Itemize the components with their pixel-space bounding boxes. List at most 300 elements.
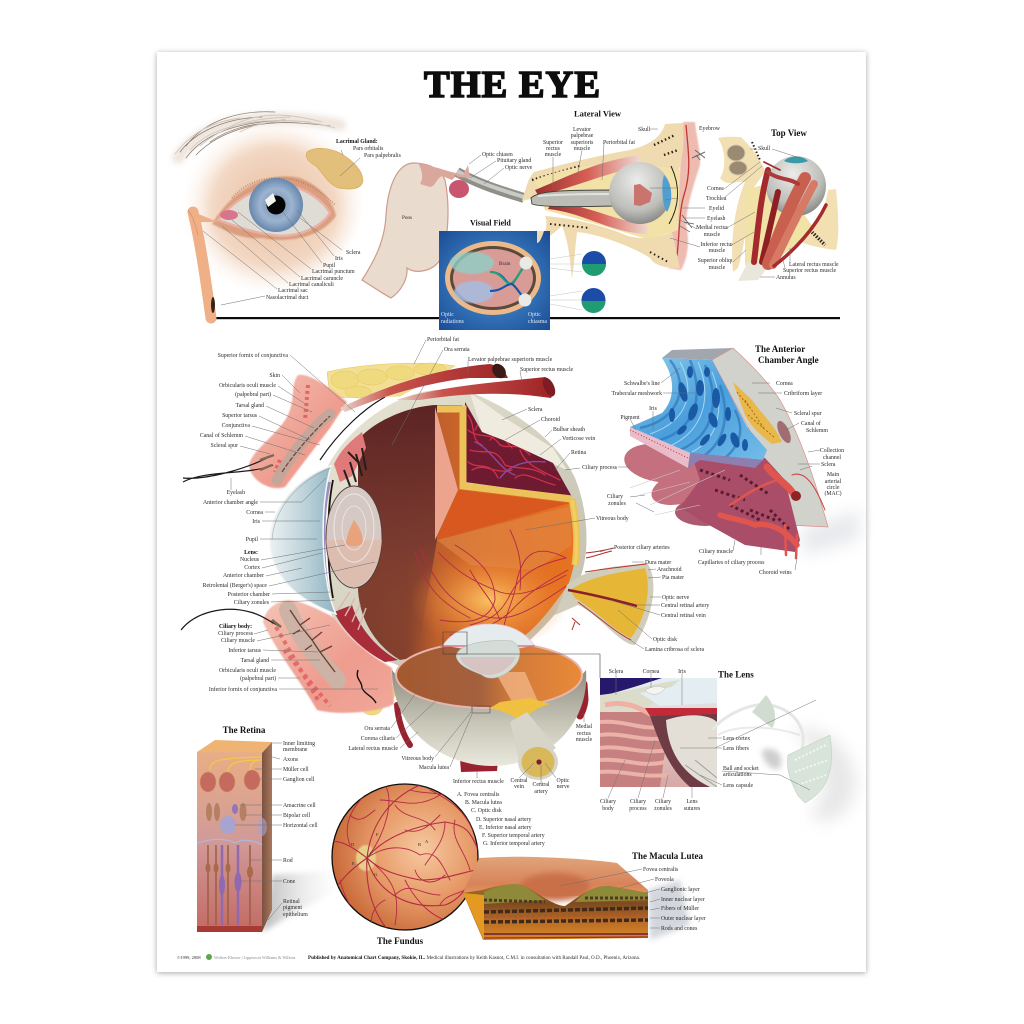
heading: The Retina: [223, 725, 266, 735]
panel: transverse eye bowl: Macula lutea: [419, 765, 449, 771]
panel: the lens: Ciliary: [630, 799, 646, 805]
fused corner of skull in panel: [537, 231, 544, 243]
yellow disk notch: [490, 698, 550, 728]
shadow: [648, 880, 690, 940]
leader lines and labels: Lacrimal punctum: [312, 269, 355, 275]
duct opening: [211, 297, 215, 313]
globe: [766, 156, 826, 216]
panel: the retina: epithelium: [283, 912, 308, 918]
panel: anterior chamber angle: Cornea: [776, 381, 793, 387]
vessels: [330, 785, 478, 930]
ciliary processes: [622, 439, 735, 526]
front cross section: [463, 884, 648, 940]
icon: publisher logo: [206, 954, 212, 960]
panel: the retina: Rod: [283, 858, 293, 864]
labels: Ora serrata: [364, 726, 390, 732]
panel: anterior chamber angle: Iris: [649, 406, 658, 412]
leader lines and labels: Sclera: [346, 250, 361, 256]
visual field sight lines: [550, 254, 582, 310]
blue background: [439, 231, 550, 330]
footer credits: ©1999, 2008: [177, 955, 201, 961]
optic nerve sheath: [531, 190, 615, 207]
labels: Fovea centralis: [643, 867, 679, 873]
labels left: Orbicularis oculi muscle: [219, 668, 276, 674]
panel: the lens: zonules: [654, 806, 673, 812]
panel: anterior chamber angle: Choroid veins: [759, 570, 792, 576]
highlight: [265, 193, 276, 207]
pigment epithelium: [197, 926, 262, 932]
panel: pons and optic nerve: Pons: [402, 215, 412, 221]
iris front edge: [630, 427, 690, 468]
labels left: Iris: [252, 519, 261, 525]
panel: top view: Skull: [758, 146, 771, 152]
labels optic nerve: Lamina cribrosa of sclera: [645, 646, 704, 653]
panel: the retina: Amacrine cell: [283, 803, 316, 809]
upper eyelid: [249, 375, 347, 488]
labels: Levator: [573, 127, 591, 133]
panel: the retina: Axons: [283, 757, 299, 763]
labels left: Superior tarsus: [222, 413, 258, 419]
labels left: [200, 352, 378, 693]
letter markers: C: [370, 851, 373, 856]
leader lines and labels: Lacrimal Gland:: [336, 139, 378, 145]
iris: [249, 178, 303, 232]
labels: Superior: [543, 140, 563, 146]
labels right: Choroid: [541, 417, 560, 423]
panel: transverse eye bowl: Corona ciliaris: [361, 736, 396, 742]
labels: muscle: [704, 232, 721, 238]
panel: the lens: process: [629, 806, 647, 812]
inferior rectus muscle: [548, 202, 648, 234]
panel: transverse eye bowl: rectus: [577, 731, 592, 737]
panel: top view: Lateral rectus muscle: [789, 262, 839, 268]
pituitary gland: [449, 180, 469, 198]
panel: anterior chamber angle: Trabecular meshwork: [612, 391, 662, 397]
labels: Optic nerve: [505, 165, 533, 171]
labels left: Pupil: [246, 537, 258, 543]
panel: the lens: articulations: [723, 772, 752, 778]
panel: anterior chamber angle: Scleral spur: [794, 411, 822, 417]
fundus glow: [410, 550, 570, 650]
heading: The Anterior: [755, 344, 805, 354]
pink muscle layers: [600, 712, 668, 787]
iris: [323, 482, 329, 600]
panel: pons and optic nerve: [362, 163, 524, 298]
labels: rectus: [546, 146, 561, 152]
cribriform mesh: [733, 382, 782, 444]
vessels: [720, 467, 825, 558]
labels right: Ora serrata: [444, 347, 470, 353]
key: E. Inferior nasal artery: [479, 824, 532, 831]
leaders: [608, 673, 816, 798]
panel: anterior chamber angle: arterial: [825, 479, 842, 485]
panel: transverse eye bowl: Central: [532, 782, 550, 788]
cut end of nerve: [518, 744, 558, 780]
eyes: [520, 256, 532, 270]
labels left: Ciliary process: [218, 631, 254, 637]
lens body: [666, 715, 717, 787]
labels left: Tarsal gland: [236, 403, 264, 409]
panel: the retina: membrane: [283, 747, 308, 753]
panel: transverse eye bowl: nerve: [557, 784, 570, 790]
large fiber chunk: [787, 735, 832, 803]
cornea: [270, 466, 336, 614]
optic nerve: [570, 568, 648, 638]
horizontal cells: [220, 816, 236, 834]
panel: anterior chamber angle: zonules: [608, 501, 627, 507]
labels: Trochlea: [706, 196, 727, 202]
panel: the lens: [600, 669, 856, 821]
orange cut wall: [437, 490, 570, 540]
labels: muscle: [709, 265, 726, 271]
labels right: Vitreous body: [596, 516, 629, 522]
leader lines and labels: Lacrimal caruncle: [301, 276, 343, 282]
panel: the macula lutea: [463, 851, 706, 940]
labels: Superior oblique: [698, 258, 737, 264]
eyeball opening: [218, 185, 330, 236]
sclera wedge: [712, 348, 828, 527]
labels: Inner limiting: [283, 741, 315, 747]
upper orbital fat: [327, 363, 455, 398]
panel: the lens: Ciliary: [655, 799, 671, 805]
labels left: Eyelash: [227, 490, 245, 496]
eyelashes: [181, 455, 281, 630]
subheading: Top View: [771, 128, 807, 138]
panel: lateral view: [469, 108, 737, 279]
subheading: Lateral View: [574, 108, 622, 118]
eyebrow: [175, 112, 340, 158]
labels left: Ciliary zonules: [234, 600, 270, 606]
labels left: Retrolental (Berger's) space: [203, 582, 267, 589]
orbital fat: [535, 164, 680, 240]
key: D. Superior nasal artery: [476, 817, 531, 823]
visual pathways: [490, 268, 524, 284]
leader lines and labels: Lacrimal canaliculi: [289, 282, 334, 288]
panel: fundus: [330, 784, 545, 946]
labels: muscle: [709, 248, 726, 254]
upper orbital bone: [522, 123, 683, 201]
letter markers: A: [425, 839, 429, 844]
labels left: Cornea: [246, 510, 263, 516]
zoom box: [443, 632, 467, 654]
pink cut wall: [435, 407, 458, 540]
amacrine and bipolar cells: [206, 803, 246, 821]
panel: anterior chamber angle: Pigment: [620, 415, 640, 421]
labels left: Anterior chamber: [223, 573, 264, 579]
labels left: Ciliary body:: [219, 624, 252, 630]
lateral muscle insertion: [634, 184, 652, 206]
key: F. Superior temporal artery: [482, 833, 545, 839]
labels: superioris: [571, 140, 594, 146]
labels: Medial rectus: [696, 225, 729, 231]
letter markers: [351, 832, 429, 877]
key: B. Macula lutea: [465, 800, 502, 806]
labels left: Conjunctiva: [222, 423, 250, 429]
top surface: [463, 857, 648, 896]
meshwork strands and holes: [640, 360, 748, 458]
labels left: Posterior chamber: [228, 592, 270, 598]
panel: visual field: chiasma: [528, 319, 547, 325]
panel: visual field: Optic: [528, 312, 541, 318]
lens: [326, 486, 382, 588]
labels: [724, 149, 800, 277]
sclera white: [600, 680, 680, 715]
panel: anterior chamber angle: Canal of: [801, 420, 821, 427]
panel: transverse eye bowl: Optic: [557, 778, 570, 784]
panel: the retina: Ganglion cell: [283, 777, 315, 783]
lateral rectus stub: [397, 705, 410, 745]
conjunctival black line: [320, 397, 385, 460]
labels: Brain: [499, 261, 511, 267]
eyelid and rim: [212, 176, 336, 240]
labels: Sclera: [609, 669, 624, 675]
labels right: Vorticose vein: [562, 436, 595, 442]
bone speckle: [532, 135, 678, 180]
labels left: Superior fornix of conjunctiva: [218, 352, 288, 359]
small fiber chunk: [752, 695, 775, 728]
panel: anterior chamber angle: Capillaries of ciliary process: [698, 559, 765, 566]
labels: muscle: [574, 146, 591, 152]
panel: transverse eye bowl: Central: [510, 778, 528, 784]
facial soft tissue: [668, 122, 700, 270]
nerve stub: [510, 712, 556, 772]
panel: the retina: Müller cell: [283, 767, 309, 773]
footer credits: Wolters Kluwer | Lippincott Williams & Wilkins: [214, 955, 296, 960]
panel: anterior chamber angle: Collection: [820, 448, 844, 454]
panel: the lens: Lens cortex: [723, 736, 750, 742]
labels left: Nucleus: [240, 557, 260, 563]
poster illustration: [154, 50, 870, 976]
leader lines and labels: Lacrimal sac: [278, 288, 308, 294]
left yellow wedge: [463, 893, 484, 940]
section panel: [600, 678, 717, 787]
rim tissue: [440, 645, 535, 647]
leaders: [560, 869, 660, 928]
lower lid streaks: [272, 620, 330, 706]
dark blue band: [600, 678, 662, 696]
eyelash shade: [232, 178, 335, 205]
axons: [210, 757, 262, 772]
lens: [456, 641, 520, 678]
letter markers: F: [376, 832, 379, 837]
horizontal processes: [197, 839, 262, 845]
medial bone and sinus: [718, 137, 765, 272]
labels: Skull: [638, 127, 651, 133]
superior rectus muscle: [396, 377, 553, 400]
panel: the macula lutea: Ganglionic layer: [661, 887, 700, 893]
olive ganglion top: [484, 884, 648, 904]
lower fat: [345, 671, 395, 715]
ciliary fringe lower: [338, 592, 366, 630]
leader lines and labels: [203, 139, 402, 305]
heading: The Fundus: [377, 936, 424, 946]
letter markers: D: [351, 842, 355, 847]
panel: transverse eye bowl: artery: [534, 789, 548, 795]
canal of Schlemm: [774, 419, 794, 445]
panel: the retina: pigment: [283, 905, 302, 911]
optic chiasm: [452, 165, 470, 178]
upper tarsus: [277, 414, 330, 480]
leader lines and labels: Pars orbitalis: [353, 146, 384, 152]
key: C. Optic disk: [471, 808, 502, 814]
labels right: Retina: [571, 450, 587, 456]
labels right: Periorbital fat: [427, 336, 459, 343]
rods: [208, 845, 250, 925]
labels right: Bulbar sheath: [553, 427, 585, 433]
fat: [745, 180, 815, 265]
panel: visual field: [439, 218, 550, 330]
labels left: Scleral spur: [210, 443, 238, 449]
labels: [618, 368, 820, 570]
drop shadow: [262, 870, 350, 932]
panel: the lens: Lens capsule: [723, 783, 754, 789]
optic disc glow: [356, 845, 376, 871]
panel: the lens: Lens fibers: [723, 745, 750, 752]
panel: transverse eye bowl: [348, 624, 600, 795]
depression light: [520, 873, 590, 901]
panel: the macula lutea: Foveola: [655, 877, 674, 883]
panel: anterior chamber angle: (MAC): [824, 490, 842, 497]
labels left: (palpebral part): [240, 675, 276, 682]
lower ciliary body: [334, 605, 398, 662]
top grey face: [662, 348, 733, 360]
brain: [453, 249, 533, 307]
leader lines and labels: Nasolacrimal duct: [266, 295, 309, 301]
key: [457, 792, 545, 847]
labels: Pituitary gland: [497, 158, 531, 164]
labels: Optic chiasm: [482, 152, 513, 158]
blue trabecular meshwork: [630, 358, 767, 460]
labels left: Canal of Schlemm: [200, 432, 243, 439]
layers: [484, 898, 648, 902]
panel: visual field: Optic: [441, 312, 454, 318]
lacrimal gland: [306, 148, 363, 189]
labels: Eyebrow: [699, 126, 721, 132]
labels left: Lens:: [244, 550, 258, 556]
lens nucleus: [346, 520, 363, 546]
panel: anterior chamber angle: Sclera: [821, 462, 836, 468]
key: G. Inferior temporal artery: [483, 840, 545, 847]
panel: the macula lutea: Inner nuclear layer: [661, 897, 705, 903]
lower eyelid: [263, 600, 394, 713]
panel: the macula lutea: Rods and cones: [661, 926, 698, 932]
lighter floor of globe: [437, 506, 572, 570]
panel: the macula lutea: Outer nuclear layer: [661, 916, 706, 922]
labels: muscle: [545, 152, 562, 158]
key: A. Fovea centralis: [457, 792, 500, 798]
panel: anterior chamber angle: Main: [827, 472, 839, 478]
labels right: Sclera: [528, 407, 543, 413]
labels: palpebrae: [571, 133, 594, 139]
footer credits: Published by Anatomical Chart Company, Skokie, IL. Medical illustrations by Keith Kasnot, C.M.I. in consultation with Randall Paul, O.D., Phoenix, Arizona.: [308, 955, 640, 961]
title: THE EYE: [424, 64, 601, 106]
upper ciliary body: [334, 432, 366, 482]
ganglion cells: [200, 770, 260, 792]
retinal vessels: [415, 530, 568, 640]
retinal wedge: [495, 672, 540, 712]
choroid vessels: [468, 410, 560, 485]
leader lines: [235, 743, 282, 920]
panel: transverse eye bowl: Medial: [576, 724, 593, 730]
panel: anterior chamber angle: circle: [827, 485, 840, 491]
panel: anterior chamber angle: Ciliary: [607, 494, 623, 500]
labels optic nerve: Dura mater: [645, 560, 671, 566]
sclera: [327, 390, 587, 680]
panel: main eye cross-section: [181, 336, 709, 715]
panel: the retina: [197, 725, 350, 932]
inner globe: [358, 405, 576, 660]
top face: [197, 740, 272, 753]
labels right: Levator palpebrae superioris muscle: [468, 357, 553, 363]
heading: The Macula Lutea: [632, 851, 703, 861]
panel: anterior chamber angle: Schlemm: [806, 428, 828, 434]
panel: transverse eye bowl: Inferior rectus muscle: [453, 778, 504, 785]
retina stripe: [437, 409, 577, 565]
panel: the retina: Bipolar cell: [283, 813, 311, 819]
footer credits: [177, 954, 640, 961]
panel: the lens: body: [602, 806, 614, 812]
cornea dome: [443, 624, 534, 648]
circle cut end: [791, 491, 801, 501]
labels left: Inferior tarsus: [228, 647, 262, 654]
panel: transverse eye bowl: Lateral rectus muscle: [348, 746, 398, 752]
labels: Periorbital fat: [603, 139, 635, 146]
labels left: Cortex: [244, 565, 260, 571]
panel: visual field: radiations: [441, 319, 465, 325]
labels optic nerve: [610, 560, 709, 653]
inferior rectus stub: [460, 759, 498, 772]
lower tarsus: [288, 610, 337, 680]
labels right: [392, 336, 670, 552]
section divider rule: [208, 317, 840, 319]
panel: the retina: Retinal: [283, 899, 300, 905]
leader lines and labels: Iris: [335, 256, 343, 262]
fiber ribbon: [712, 705, 803, 755]
panel: transverse eye bowl: vein: [514, 784, 524, 790]
labels optic nerve: Central retinal artery: [661, 603, 709, 609]
labels left: Anterior chamber angle: [203, 500, 258, 506]
labels: Cornea: [707, 186, 724, 192]
labels optic nerve: Arachnoid: [657, 567, 682, 573]
midbrain stem: [418, 163, 458, 187]
lacrimal caruncle: [220, 210, 238, 220]
panel: anterior chamber angle: Ciliary process: [582, 465, 618, 471]
ciliary folds: [605, 703, 654, 716]
dark left wall: [358, 405, 437, 660]
side face: [262, 742, 272, 932]
labels optic nerve: Optic disk: [653, 637, 677, 643]
iris band: [645, 708, 717, 716]
heading: Visual Field: [470, 218, 511, 228]
panel: the lens: Ball and socket: [723, 766, 759, 772]
leader lines and labels: Pupil: [323, 263, 336, 269]
medial rectus stub: [580, 684, 585, 716]
letter markers: E: [352, 861, 355, 866]
optic nerve: [457, 172, 524, 198]
central retinal vessel: [568, 590, 637, 606]
panel: the lens: Ciliary: [600, 799, 616, 805]
labels left: Tarsal gland: [241, 658, 269, 664]
cones: [222, 845, 238, 925]
ciliary fringe upper: [344, 448, 366, 486]
letter markers: B: [418, 842, 421, 847]
icon: visual field ball lower: [582, 288, 606, 313]
apex tendon pale: [738, 262, 772, 281]
zonule strands: [630, 470, 725, 515]
muscles: [754, 162, 826, 266]
icon: visual field ball upper: [582, 251, 606, 276]
eyebrow tuft: [692, 150, 705, 160]
